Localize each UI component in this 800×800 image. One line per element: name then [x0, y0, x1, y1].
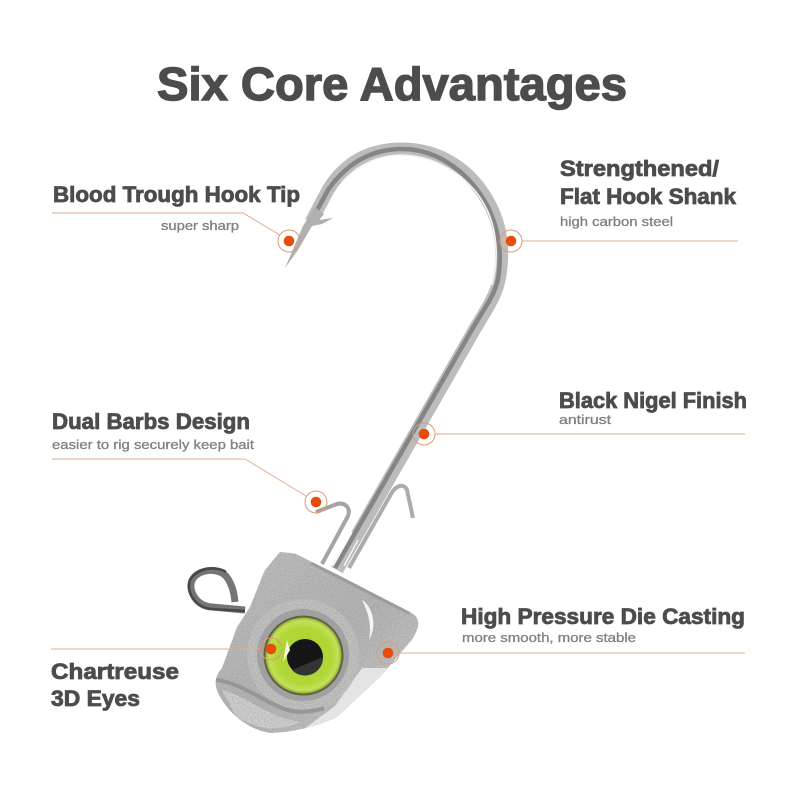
lip groove: [216, 680, 324, 712]
callout: blood trough hook tip: Blood Trough Hook Tip: [53, 182, 300, 207]
callout: black nigel finish: Black Nigel Finish: [559, 388, 747, 413]
callout: dual barbs design: Dual Barbs Design: [52, 409, 250, 434]
callout: black nigel finish: antirust: [559, 412, 611, 427]
callout: high pressure die casting: more smooth, more stable: [462, 630, 636, 645]
callout: high pressure die casting: [377, 604, 745, 664]
pupil: [287, 639, 323, 676]
title: Six Core Advantages: [157, 58, 627, 110]
chartreuse eye: [266, 618, 342, 694]
callout: blood trough hook tip: super sharp: [161, 218, 239, 233]
callout: chartreuse 3D eyes: Chartreuse: [51, 659, 179, 684]
callout: high pressure die casting: High Pressure Die Casting: [461, 604, 745, 629]
hook point and barb: [285, 207, 333, 268]
callout: chartreuse 3D eyes: [51, 638, 282, 711]
lip: [222, 690, 300, 728]
eye glint: [283, 640, 290, 662]
hook wire and shank: [311, 149, 502, 570]
callout: flat hook shank: [500, 156, 738, 252]
head top edge shadow: [312, 562, 410, 612]
callout: flat hook shank: Strengthened/: [560, 156, 719, 181]
callout: dual barbs design: easier to rig securely keep bait: [52, 437, 254, 452]
callout: blood trough hook tip: [52, 182, 300, 252]
eye socket: [264, 616, 344, 696]
callout: flat hook shank: high carbon steel: [560, 214, 673, 229]
lower right highlight: [306, 638, 413, 728]
icon: jig hook: [189, 149, 502, 740]
barb: right: [349, 486, 413, 568]
line eye ring: [189, 568, 245, 611]
callout: black nigel finish: [413, 388, 747, 445]
socket ridge: [247, 599, 359, 711]
callout: chartreuse 3D eyes: 3D Eyes: [51, 686, 140, 711]
callout: dual barbs design: [52, 409, 327, 513]
white streak: [362, 600, 373, 640]
callout: flat hook shank: Flat Hook Shank: [560, 184, 737, 209]
barb: left: [316, 504, 349, 564]
lead head: [205, 552, 420, 740]
